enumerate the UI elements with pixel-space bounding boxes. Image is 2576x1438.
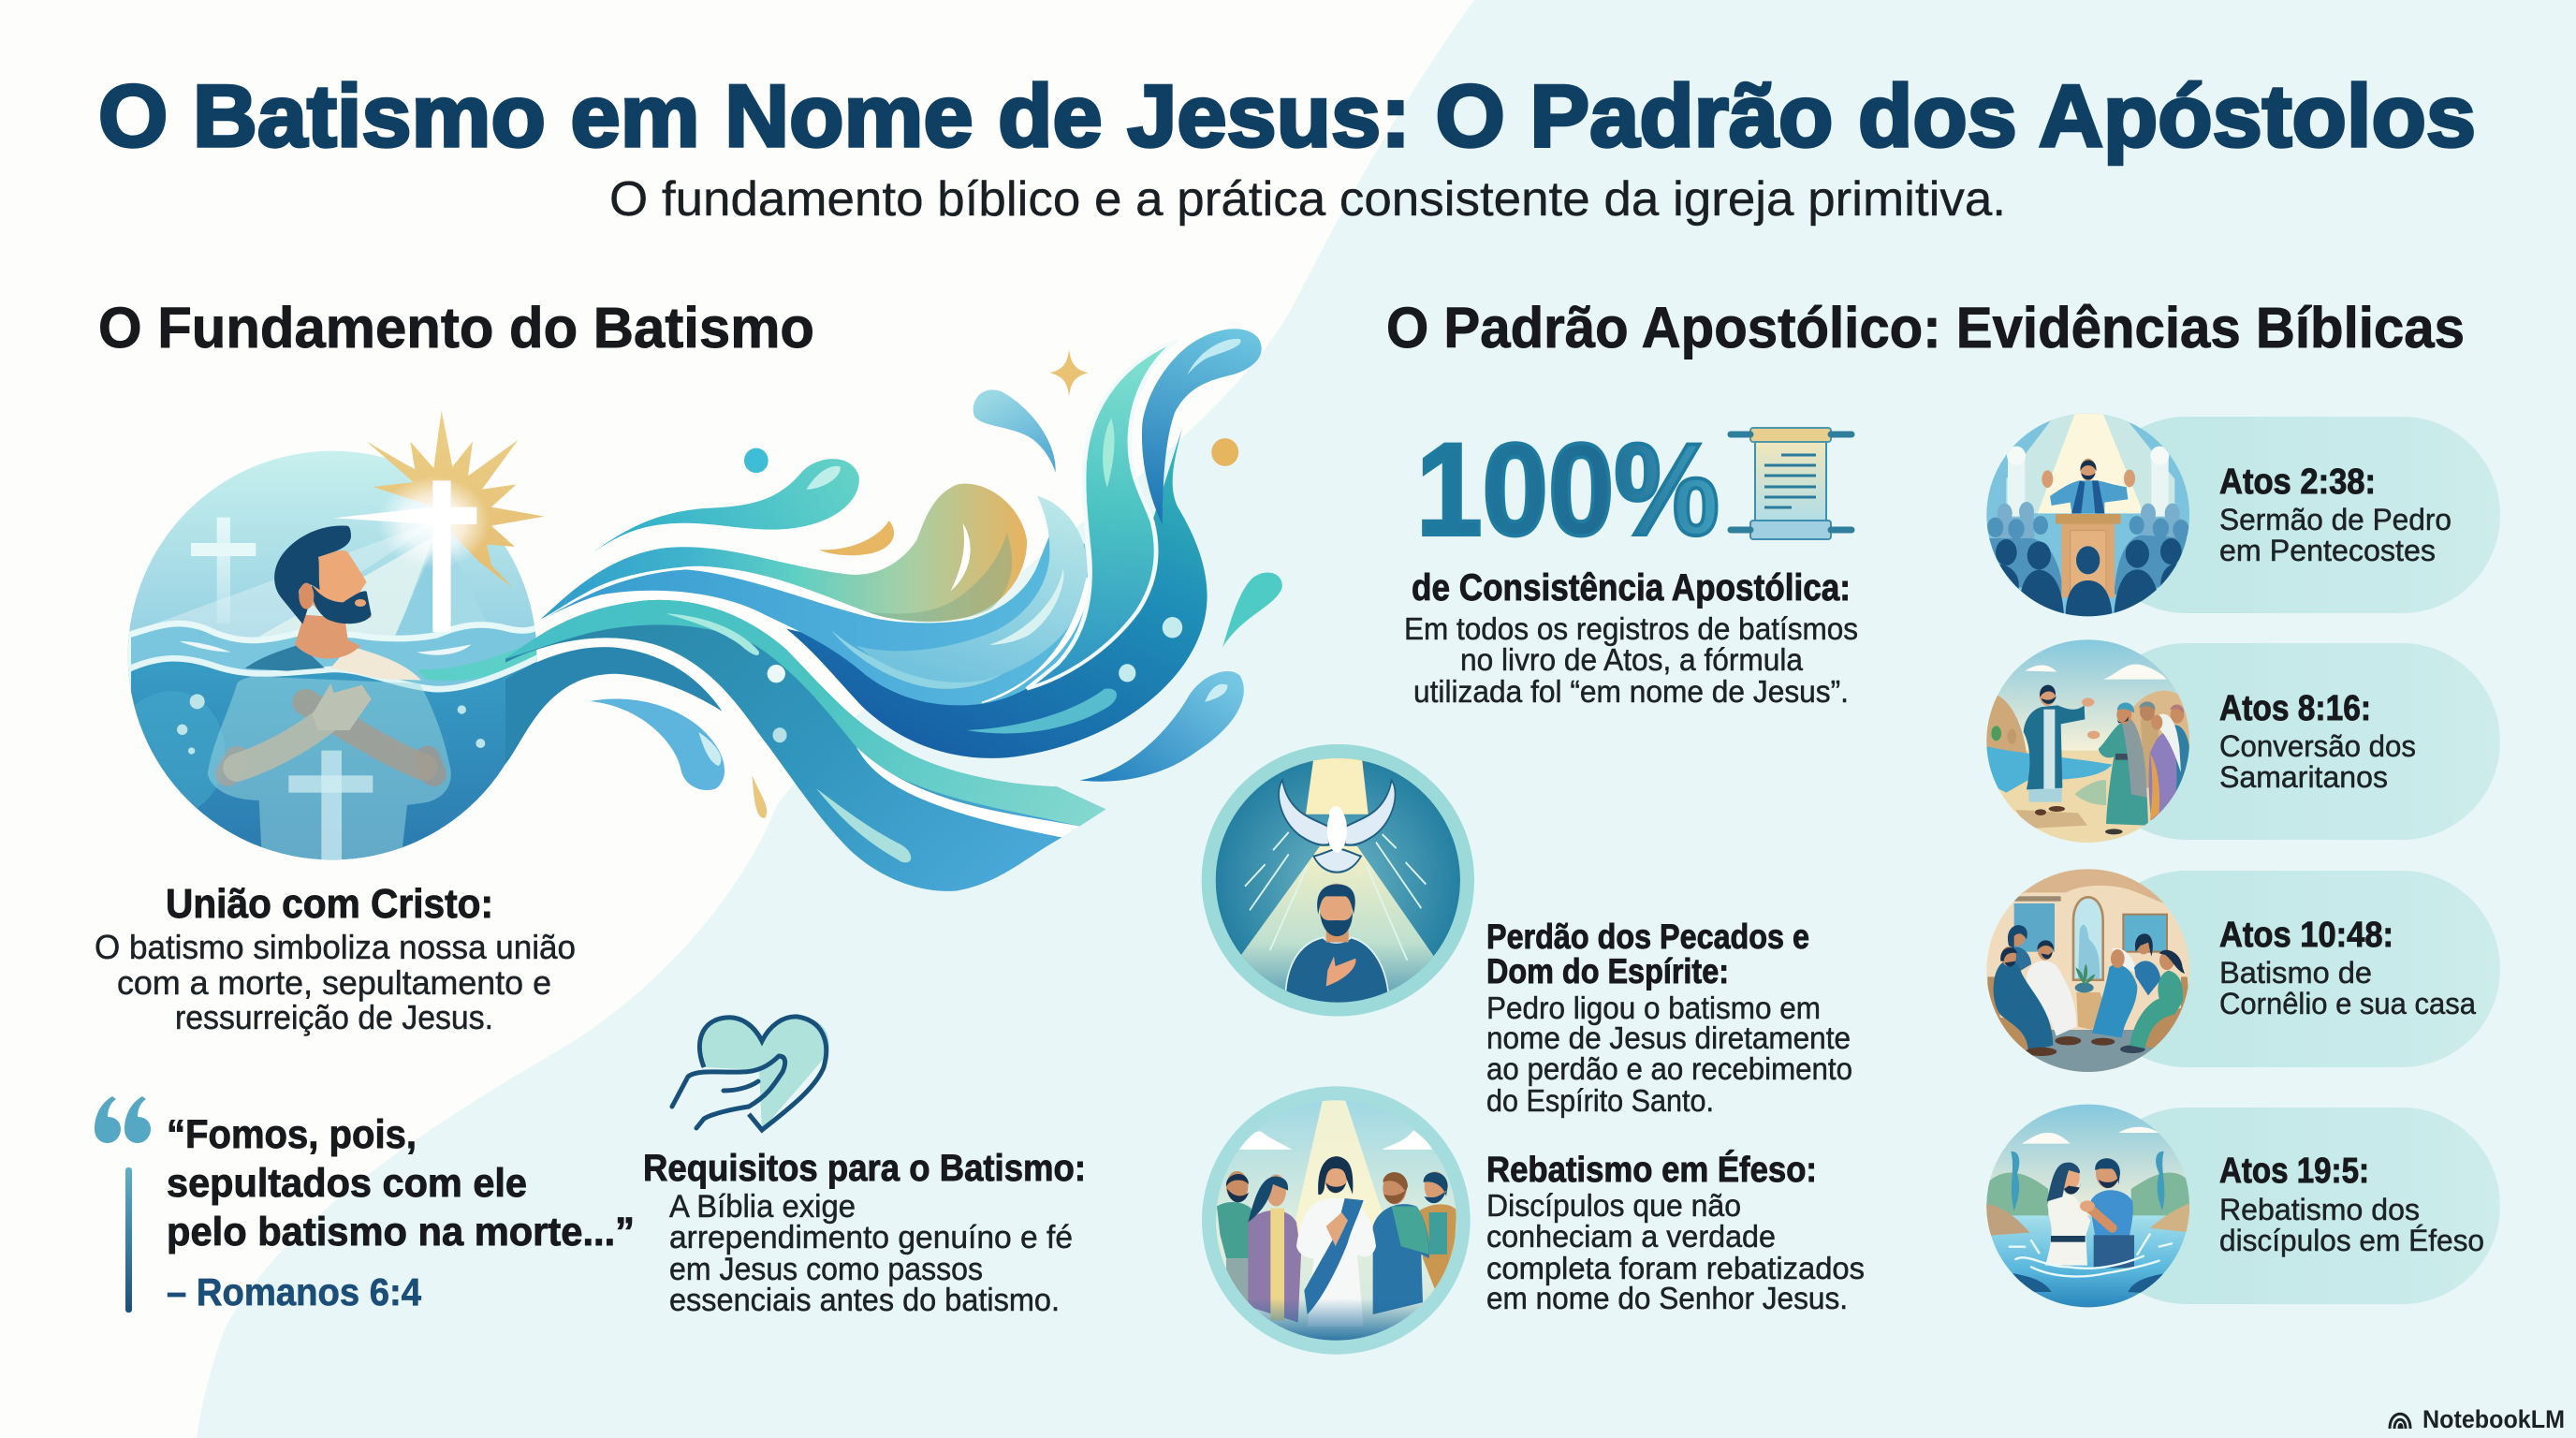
water ribbon: main teal flowing down [505,600,1105,891]
label: Batismo de [2219,956,2372,990]
label: Samaritanos [2219,760,2388,794]
text block: União com Cristo: O batismo simboliza nossa união [95,928,576,966]
illustration: disciples with Jesus [1202,1086,1471,1355]
text block: consistência: de Consistência Apostólica: [1412,567,1851,609]
illustration: man in baptism water with flowing wave [124,329,1282,891]
illustration: baptism in water [1984,1103,2193,1313]
water ribbon: dark band into circle [505,647,722,764]
text block: Rebatismo em Éfeso [1486,1149,1865,1315]
text block: Requisitos: Requisitos para o Batismo: [643,1148,1086,1189]
watermark: NotebookLM: NotebookLM [2422,1405,2565,1433]
text block: Rebatismo em Éfeso: Rebatismo em Éfeso: [1486,1149,1817,1190]
heading: left section: O Fundamento do Batismo [98,296,814,360]
card: Atos 10:48 [1984,868,2500,1077]
text block: consistência: Em todos os registros de batísmos [1404,611,1858,646]
text block: União com Cristo: ressurreição de Jesus. [175,998,493,1036]
illustration: Pedro preaching [1984,412,2193,618]
subtitle: O fundamento bíblico e a prática consistente da igreja primitiva. [609,172,2006,227]
quote: Romanos 6:4 [95,1096,635,1313]
label: Cornêlio e sua casa [2219,987,2476,1020]
card: Atos 2:38 [1984,412,2500,618]
illustration: dove over man [1202,744,1474,1017]
label: Rebatismo dos [2219,1193,2420,1226]
text block: Rebatismo em Éfeso: completa foram rebatizados [1486,1251,1865,1285]
text block: consistência: no livro de Atos, a fórmula [1460,642,1804,677]
text block: Requisitos: A Bíblia exige [669,1189,856,1225]
icon: dove [1279,780,1396,873]
text block: consistência [1404,567,1858,709]
label: Atos 19:5: [2219,1152,2369,1191]
text block: Rebatismo em Éfeso: conheciam a verdade [1486,1219,1776,1254]
accent bar [125,1167,132,1313]
label [2219,462,2452,567]
label: Atos 8:16: [2219,689,2371,728]
icon: heart in hand [672,1016,829,1130]
water ribbon: light blue middle [543,529,1088,705]
text block: Perdão dos Pecados: ao perdão e ao recebimento [1486,1051,1852,1086]
text block: União com Cristo [95,881,576,1036]
figure: man's crossed arms under water [227,683,433,774]
quote: Romanos 6:4: “Fomos, pois, [167,1112,417,1157]
water plume: teal strand [1027,340,1178,689]
label: em Pentecostes [2219,534,2436,567]
text block: Perdão dos Pecados: nome de Jesus diretamente [1486,1020,1851,1055]
quote: Romanos 6:4: pelo batismo na morte...” [167,1210,635,1255]
text block: Perdão dos Pecados: Pedro ligou o batismo em [1486,990,1821,1025]
text block: Rebatismo em Éfeso: em nome do Senhor Jesus. [1486,1281,1848,1315]
text block: Requisitos: em Jesus como passos [669,1252,983,1287]
water flow [505,329,1282,891]
label [2219,916,2476,1020]
icon: radiant sun with cross [334,410,545,632]
card: Atos 8:16 [1984,638,2500,844]
water plume: blue head [1142,329,1262,524]
illustration: Cornelius household [1984,868,2193,1077]
label: discípulos em Éfeso [2219,1224,2484,1257]
label: Sermão de Pedro [2219,503,2452,536]
text block: Requisitos: arrependimento genuíno e fé [669,1220,1073,1255]
text block: Requisitos [643,1148,1086,1318]
water plume: pale crest [856,496,1087,682]
label: Conversão dos [2219,729,2416,763]
text block: Perdão dos Pecados: do Espírito Santo. [1486,1083,1714,1118]
water ribbon: deep blue crescent [786,428,1208,758]
water ribbon: upper teal to gold [540,484,1027,622]
card: Atos 19:5 [1984,1103,2500,1313]
figure: man above water [245,525,421,681]
text block: Perdão dos Pecados: Dom do Espírite: [1486,952,1729,990]
heading: right section: O Padrão Apostólico: Evidências Bíblicas [1386,296,2465,360]
quote: Romanos 6:4: sepultados com ele [167,1161,527,1206]
text block: Requisitos: essenciais antes do batismo. [669,1283,1060,1318]
illustration: Samaritans [1984,638,2193,844]
water drops and sparkles [590,349,1282,818]
text block: Perdão dos Pecados: Perdão dos Pecados e [1486,917,1809,956]
label [2219,689,2416,794]
text block: União com Cristo: com a morte, sepultamento e [117,963,551,1002]
stat: 100%: 100% [1416,416,1720,563]
icon: quote mark [95,1096,151,1143]
label: Atos 10:48: [2219,916,2393,955]
scene: immersion circle with man [124,410,562,871]
quote: Romanos 6:4: – Romanos 6:4 [167,1270,421,1313]
text block: Rebatismo em Éfeso: Discípulos que não [1486,1188,1741,1223]
label [2219,1152,2484,1257]
label: Atos 2:38: [2219,462,2376,502]
text block: Perdão dos Pecados [1486,917,1852,1118]
title: O Batismo em Nome de Jesus: O Padrão dos Apóstolos [98,66,2476,165]
text block: União com Cristo: União com Cristo: [166,881,493,927]
text block: consistência: utilizada fol “em nome de Jesus”. [1413,674,1849,709]
icon: scroll [1731,428,1852,539]
